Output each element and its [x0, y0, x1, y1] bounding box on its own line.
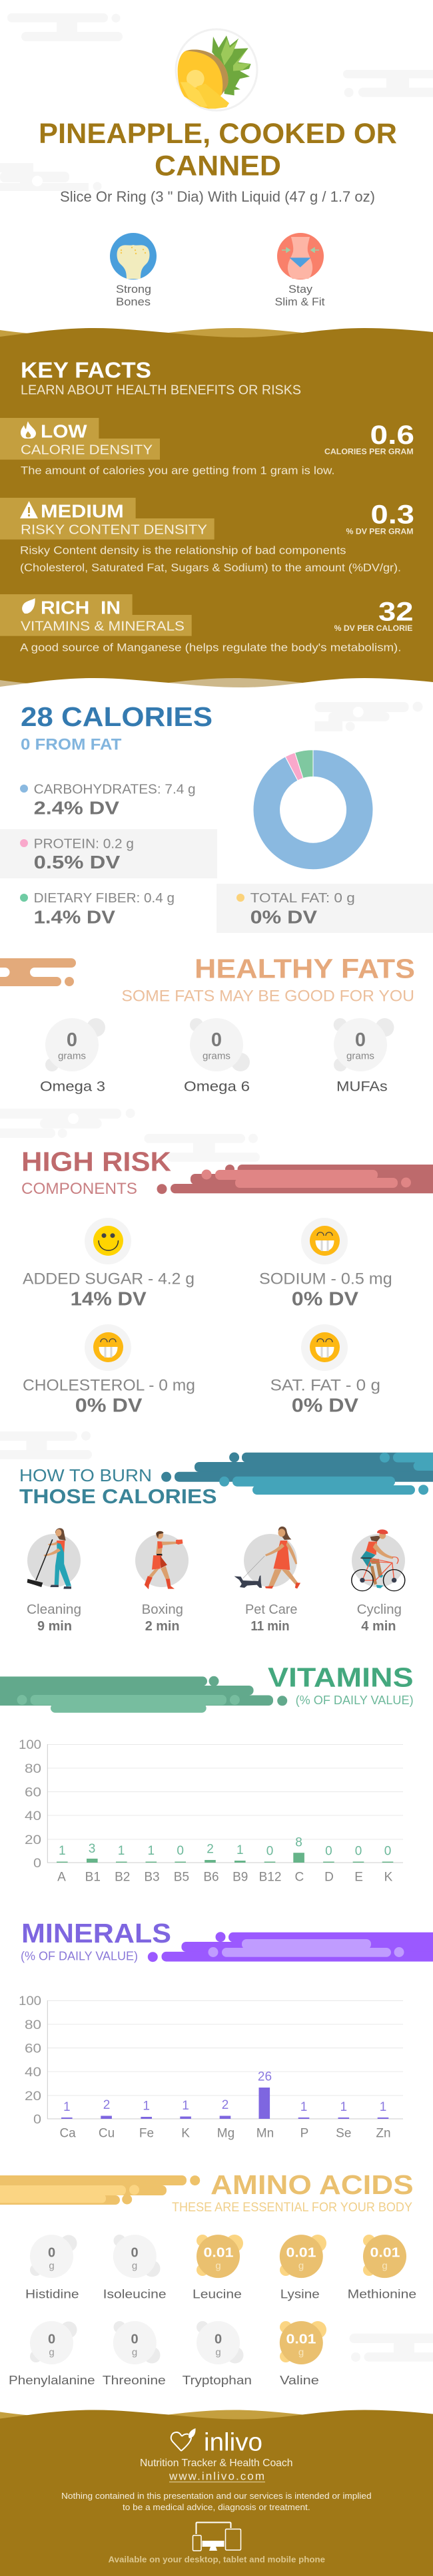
subheading: from fat: 0 FROM FAT: [21, 736, 122, 754]
bar chart: minerals: Mn: [256, 2127, 274, 2141]
item: sodium: 0% DV: [292, 1289, 359, 1310]
item: saturated fat: SAT. FAT - 0 g: [270, 1376, 380, 1394]
subheading: (% OF DAILY VALUE): [21, 1949, 138, 1962]
activity: pet care: [234, 1527, 300, 1634]
amino: phenylalanine: 0: [48, 2332, 55, 2347]
item: cholesterol: [23, 1324, 195, 1417]
panel: how to burn those calories: THOSE CALORIES: [19, 1485, 217, 1508]
benefit: strong bones: Bones: [116, 295, 151, 308]
item: omega 3: Omega 3: [40, 1079, 105, 1094]
logo: inlivo: [171, 2428, 262, 2457]
fact: rich in vitamins and minerals: [0, 594, 414, 653]
item: omega 6: 0: [211, 1029, 222, 1051]
bar chart: minerals: 40: [25, 2066, 41, 2080]
item: sodium: SODIUM - 0.5 mg: [259, 1270, 392, 1288]
amino: valine: 0.01: [286, 2332, 316, 2347]
item: mufas: [334, 1018, 394, 1094]
legend: carbohydrates: CARBOHYDRATES: 7.4 g: [34, 781, 196, 797]
bar chart: minerals: 100: [19, 1994, 41, 2008]
subtitle: Slice Or Ring (3 " Dia) With Liquid (47 g / 1.7 oz): [60, 188, 375, 205]
item: added sugar: 14% DV: [71, 1289, 147, 1310]
bar chart: vitamins: B12: [259, 1871, 281, 1885]
fact: rich in vitamins and minerals: RICH IN: [41, 597, 121, 618]
bar chart: vitamins: B2: [115, 1871, 130, 1885]
icon: leaf: [22, 598, 35, 614]
bar chart: vitamins: 1: [236, 1843, 244, 1857]
website link: www.inlivo.com: [169, 2470, 264, 2482]
bar chart: vitamins: B9: [232, 1871, 248, 1885]
item: saturated fat: 0% DV: [292, 1395, 359, 1417]
panel: amino acids: [0, 2169, 416, 2387]
benefit: stay slim and fit: Stay: [288, 283, 313, 295]
legend: total fat: TOTAL FAT: 0 g: [250, 890, 355, 906]
fact: medium risky content density: RISKY CONTENT DENSITY: [21, 522, 207, 537]
fact: medium risky content density: 0.3: [370, 500, 414, 530]
heading: AMINO ACIDS: [211, 2169, 414, 2200]
decoration: yellow pills: [0, 2175, 200, 2205]
bar chart: vitamins: 3: [89, 1842, 95, 1856]
amino: isoleucine: 0: [131, 2246, 139, 2261]
legend: total fat: [236, 890, 355, 927]
legend: dietary fiber: DIETARY FIBER: 0.4 g: [34, 890, 175, 906]
bar chart: minerals: 20: [25, 2090, 41, 2104]
bar chart: vitamins: C: [295, 1871, 304, 1885]
donut chart: [253, 750, 373, 870]
bar chart: vitamins: B5: [174, 1871, 189, 1885]
fact: low calorie density: [0, 418, 414, 477]
bar chart: vitamins: K: [384, 1871, 393, 1885]
panel: calories: [0, 701, 433, 933]
panel: how to burn those calories: [19, 1452, 433, 1634]
bar chart: minerals: 2: [103, 2098, 110, 2112]
amino: histidine: 0: [48, 2246, 55, 2261]
disclaimer: to be a medical advice, diagnosis or treatment.: [123, 2502, 310, 2512]
amino: lysine: g: [298, 2261, 304, 2272]
fact: low calorie density: CALORIE DENSITY: [21, 442, 153, 457]
item: sodium: [259, 1218, 392, 1310]
bar chart: vitamins: 100: [19, 1738, 41, 1752]
panel: vitamins: [0, 1662, 414, 1885]
bar chart: vitamins: 0: [355, 1845, 362, 1858]
item: omega 6: grams: [203, 1051, 230, 1062]
bar chart: vitamins: 1: [59, 1844, 66, 1858]
bar chart: minerals: 1: [143, 2099, 150, 2114]
bar chart: vitamins: 40: [25, 1809, 41, 1823]
title: [39, 118, 397, 182]
amino: tryptophan: g: [215, 2347, 221, 2358]
bar chart: vitamins: 0: [325, 1845, 332, 1858]
amino: histidine: g: [49, 2261, 55, 2272]
bar chart: minerals: Cu: [99, 2127, 115, 2141]
icon: smiley: [93, 1226, 123, 1256]
fact: low calorie density: CALORIES PER GRAM: [324, 447, 414, 457]
bar chart: minerals: P: [300, 2127, 308, 2141]
amino: leucine: [193, 2235, 243, 2300]
subheading: (% OF DAILY VALUE): [296, 1694, 414, 1707]
activity: boxing: Boxing: [142, 1602, 183, 1617]
bar chart: minerals: K: [181, 2127, 190, 2141]
amino: threonine: [103, 2321, 166, 2387]
logo: inlivo: inlivo: [204, 2429, 262, 2457]
tagline: Nutrition Tracker & Health Coach: [140, 2458, 293, 2469]
bar chart: vitamins: 80: [25, 1762, 41, 1776]
bar chart: vitamins: 1: [148, 1844, 155, 1858]
item: cholesterol: 0% DV: [75, 1395, 143, 1417]
legend: dietary fiber: 1.4% DV: [34, 906, 115, 927]
activity: boxing: 2 min: [145, 1619, 180, 1634]
fact: medium risky content density: MEDIUM: [41, 500, 124, 521]
bar chart: vitamins: 0: [384, 1845, 391, 1858]
bar chart: vitamins: B6: [203, 1871, 219, 1885]
bar chart: minerals: Fe: [139, 2127, 154, 2141]
activity: pet care: 11 min: [250, 1619, 289, 1634]
amino: methionine: [348, 2235, 416, 2300]
fact: rich in vitamins and minerals: A good source of Manganese (helps regulate the body's metabolism).: [20, 642, 401, 653]
activity: cleaning: 9 min: [37, 1619, 72, 1634]
item: cholesterol: CHOLESTEROL - 0 mg: [23, 1376, 195, 1394]
amino: tryptophan: Tryptophan: [183, 2374, 252, 2387]
icon: grin: [310, 1226, 340, 1256]
benefit: stay slim and fit: [274, 233, 325, 308]
amino: isoleucine: Isoleucine: [103, 2287, 167, 2300]
item: mufas: 0: [355, 1029, 366, 1051]
bar chart: vitamins: [19, 1738, 403, 1885]
wave top: [0, 328, 433, 355]
fact: low calorie density: LOW: [41, 421, 87, 441]
amino: tryptophan: 0: [215, 2332, 222, 2347]
amino: isoleucine: g: [132, 2261, 137, 2272]
amino: tryptophan: [183, 2321, 252, 2387]
bar chart: vitamins: B1: [85, 1871, 101, 1885]
bar chart: vitamins: B3: [144, 1871, 160, 1885]
bar chart: vitamins: A: [57, 1871, 66, 1885]
panel: key facts: [0, 328, 433, 692]
amino: valine: [280, 2321, 326, 2387]
decoration: purple pills: [148, 1932, 433, 1962]
heading: 28 calories: 28 CALORIES: [21, 701, 213, 732]
heading: VITAMINS: [268, 1662, 414, 1693]
activity: cycling: Cycling: [357, 1602, 402, 1617]
icon: devices: [193, 2522, 241, 2551]
amino: leucine: Leucine: [193, 2287, 242, 2300]
amino: phenylalanine: g: [49, 2347, 55, 2358]
legend: protein: PROTEIN: 0.2 g: [34, 836, 134, 851]
decoration: orange pills: [0, 958, 76, 986]
benefit: stay slim and fit: Slim & Fit: [274, 295, 325, 308]
subheading: LEARN ABOUT HEALTH BENEFITS OR RISKS: [21, 383, 301, 398]
fact: low calorie density: 0.6: [370, 421, 414, 450]
bar chart: vitamins: 20: [25, 1833, 41, 1847]
benefit: strong bones: Strong: [116, 283, 151, 295]
bar chart: vitamins: 0: [33, 1857, 41, 1871]
amino: phenylalanine: [9, 2321, 95, 2387]
amino: lysine: [280, 2235, 326, 2300]
bar chart: minerals: Zn: [376, 2127, 391, 2141]
decoration: green pills: [0, 1676, 287, 1713]
bar chart: minerals: 80: [25, 2018, 41, 2032]
bar chart: minerals: 1: [63, 2100, 71, 2114]
heading: MINERALS: [21, 1918, 171, 1948]
bar chart: minerals: 60: [25, 2042, 41, 2056]
bar chart: vitamins: 0: [266, 1845, 273, 1858]
amino: lysine: Lysine: [280, 2287, 320, 2300]
item: added sugar: ADDED SUGAR - 4.2 g: [23, 1270, 195, 1288]
fact: low calorie density: The amount of calories you are getting from 1 gram is low.: [21, 465, 334, 477]
item: mufas: grams: [346, 1051, 374, 1062]
heading: HIGH RISK: [21, 1146, 171, 1177]
fact: medium risky content density: Risky Content density is the relationship of bad components: [20, 545, 346, 557]
fact: medium risky content density: [0, 498, 414, 574]
activity: cleaning: Cleaning: [27, 1602, 81, 1617]
icon: pineapple in circle: [176, 29, 257, 110]
icon: warning triangle: [20, 501, 38, 518]
amino: histidine: Histidine: [25, 2287, 79, 2300]
item: omega 6: [184, 1018, 250, 1094]
bar chart: minerals: 1: [182, 2099, 189, 2113]
activity: pet care: Pet Care: [245, 1602, 297, 1617]
fact: rich in vitamins and minerals: VITAMINS & MINERALS: [21, 618, 185, 634]
legend: protein: 0.5% DV: [34, 852, 121, 872]
wave: [0, 2410, 433, 2576]
bar chart: vitamins: D: [324, 1871, 334, 1885]
benefit: strong bones: [110, 233, 157, 308]
bar chart: vitamins: 1: [118, 1844, 125, 1858]
panel: minerals: [19, 1918, 433, 2141]
amino: valine: g: [298, 2347, 304, 2358]
wave bottom: [0, 678, 433, 692]
activity: cycling: [352, 1529, 405, 1634]
icon: bone: [110, 233, 157, 279]
activity: cleaning: [27, 1528, 81, 1634]
bar chart: minerals: Mg: [217, 2127, 234, 2141]
amino: methionine: g: [382, 2261, 388, 2272]
bar chart: vitamins: 8: [295, 1836, 302, 1850]
bar chart: minerals: 1: [300, 2100, 307, 2114]
item: omega 6: Omega 6: [184, 1079, 250, 1094]
fact: rich in vitamins and minerals: % DV PER CALORIE: [334, 624, 412, 633]
heading: key facts: KEY FACTS: [21, 358, 151, 382]
legend: carbohydrates: [20, 781, 196, 818]
disclaimer: Nothing contained in this presentation and our services is intended or implied: [61, 2491, 372, 2501]
item: omega 3: grams: [58, 1051, 86, 1062]
availability note: Available on your desktop, tablet and mobile phone: [108, 2554, 325, 2564]
title: CANNED: [155, 150, 281, 182]
title: PINEAPPLE, COOKED OR: [39, 118, 397, 150]
bar chart: minerals: Se: [336, 2127, 351, 2141]
item: saturated fat: [270, 1324, 380, 1417]
legend: dietary fiber: [20, 890, 175, 927]
panel: footer: [0, 2410, 433, 2576]
heading: HOW TO BURN: [19, 1465, 152, 1485]
amino: histidine: [25, 2235, 79, 2300]
subheading: SOME FATS MAY BE GOOD FOR YOU: [121, 987, 414, 1005]
heading: HEALTHY FATS: [195, 953, 415, 984]
fact: medium risky content density: % DV PER GRAM: [346, 527, 413, 536]
bar chart: minerals: 0: [33, 2113, 41, 2127]
decoration: red pills: [157, 1165, 433, 1194]
amino: methionine: 0.01: [370, 2246, 400, 2261]
legend: carbohydrates: 2.4% DV: [34, 797, 119, 818]
item: omega 3: 0: [67, 1029, 77, 1051]
amino: leucine: g: [215, 2261, 221, 2272]
item: mufas: MUFAs: [336, 1079, 388, 1094]
icon: flame: [21, 421, 36, 439]
bar chart: minerals: 26: [258, 2070, 272, 2084]
icon: slim waist: [277, 233, 324, 279]
amino: threonine: Threonine: [103, 2374, 166, 2387]
panel: healthy fats: [0, 953, 415, 1094]
bar chart: minerals: 1: [340, 2100, 347, 2114]
disclaimer: [61, 2491, 372, 2512]
activity: cycling: 4 min: [361, 1619, 396, 1634]
amino: lysine: 0.01: [286, 2246, 316, 2261]
amino: threonine: g: [132, 2347, 137, 2358]
amino: valine: Valine: [280, 2374, 319, 2387]
activity: boxing: [135, 1531, 189, 1634]
decoration: teal pills: [161, 1452, 433, 1495]
amino: methionine: Methionine: [348, 2287, 416, 2300]
legend: total fat: 0% DV: [250, 906, 317, 927]
bar chart: vitamins: 60: [25, 1786, 41, 1799]
amino: leucine: 0.01: [204, 2246, 233, 2261]
icon: grin: [310, 1332, 340, 1362]
icon: grin: [93, 1332, 123, 1362]
fact: rich in vitamins and minerals: 32: [378, 597, 414, 626]
item: added sugar: [23, 1218, 195, 1310]
fact: medium risky content density: (Cholesterol, Saturated Fat, Sugars & Sodium) to the amount (%DV/gr).: [20, 562, 401, 574]
bar chart: minerals: 1: [380, 2100, 386, 2114]
legend: protein: [20, 836, 134, 872]
bar chart: vitamins: E: [354, 1871, 363, 1885]
bar chart: minerals: 2: [222, 2098, 228, 2112]
subheading: COMPONENTS: [21, 1180, 137, 1198]
bar chart: vitamins: 0: [177, 1844, 184, 1858]
amino: isoleucine: [103, 2235, 167, 2300]
item: omega 3: [40, 1018, 105, 1094]
bar chart: minerals: Ca: [59, 2127, 76, 2141]
bar chart: vitamins: 2: [207, 1843, 214, 1857]
bar chart: minerals: [19, 1994, 403, 2141]
amino: threonine: 0: [131, 2332, 139, 2347]
subheading: THESE ARE ESSENTIAL FOR YOUR BODY: [172, 2201, 412, 2215]
panel: high risk components: [21, 1146, 433, 1417]
amino: phenylalanine: Phenylalanine: [9, 2374, 95, 2387]
